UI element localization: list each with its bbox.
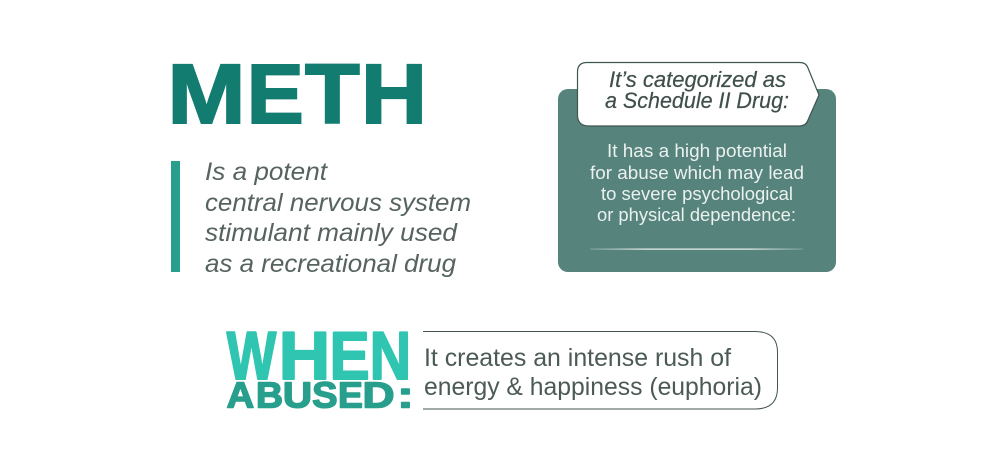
word: WHEN: E — [330, 318, 370, 394]
accent bar — [171, 161, 180, 272]
callout text — [424, 344, 762, 401]
definition text — [205, 158, 471, 278]
word: ABUSED: B — [256, 374, 283, 416]
definition text: central nervous system — [205, 189, 471, 217]
definition text: Is a potent — [205, 158, 328, 186]
title: METH: H — [361, 47, 427, 141]
definition text: stimulant mainly used — [205, 219, 458, 247]
callout: effect of abuse — [423, 332, 778, 409]
word: ABUSED — [227, 374, 414, 416]
label tag — [578, 62, 819, 126]
card body text: or physical dependence: — [597, 205, 796, 225]
callout text: energy & happiness (euphoria) — [424, 373, 762, 401]
title: METH: T — [305, 47, 360, 141]
title: METH — [168, 47, 427, 141]
card divider line — [590, 248, 803, 250]
word: ABUSED: A — [227, 374, 254, 416]
card body text: for abuse which may lead — [590, 163, 804, 183]
word: WHEN: H — [279, 318, 330, 394]
title: METH: M — [168, 47, 246, 141]
tag text: It’s categorized as — [609, 67, 786, 92]
word: ABUSED: E — [338, 374, 363, 416]
heading: WHEN ABUSED — [227, 318, 414, 416]
card body text: to severe psychological — [601, 184, 793, 204]
word: WHEN: W — [227, 318, 277, 394]
word: ABUSED: S — [312, 374, 338, 416]
word: WHEN — [227, 318, 411, 394]
word: ABUSED: U — [283, 374, 312, 416]
definition text: as a recreational drug — [205, 250, 456, 278]
callout text: It creates an intense rush of — [424, 344, 731, 372]
callout outline — [423, 332, 778, 409]
card body text: It has a high potential — [607, 141, 787, 161]
tag text: a Schedule II Drug: — [605, 88, 789, 113]
title: METH: E — [247, 47, 304, 141]
panel: Schedule II drug — [558, 62, 836, 272]
card background — [558, 89, 836, 272]
tag text — [605, 67, 789, 113]
word: WHEN: N — [370, 318, 411, 394]
word: ABUSED: : — [397, 374, 414, 416]
card body text — [590, 141, 804, 225]
word: ABUSED: D — [362, 374, 394, 416]
